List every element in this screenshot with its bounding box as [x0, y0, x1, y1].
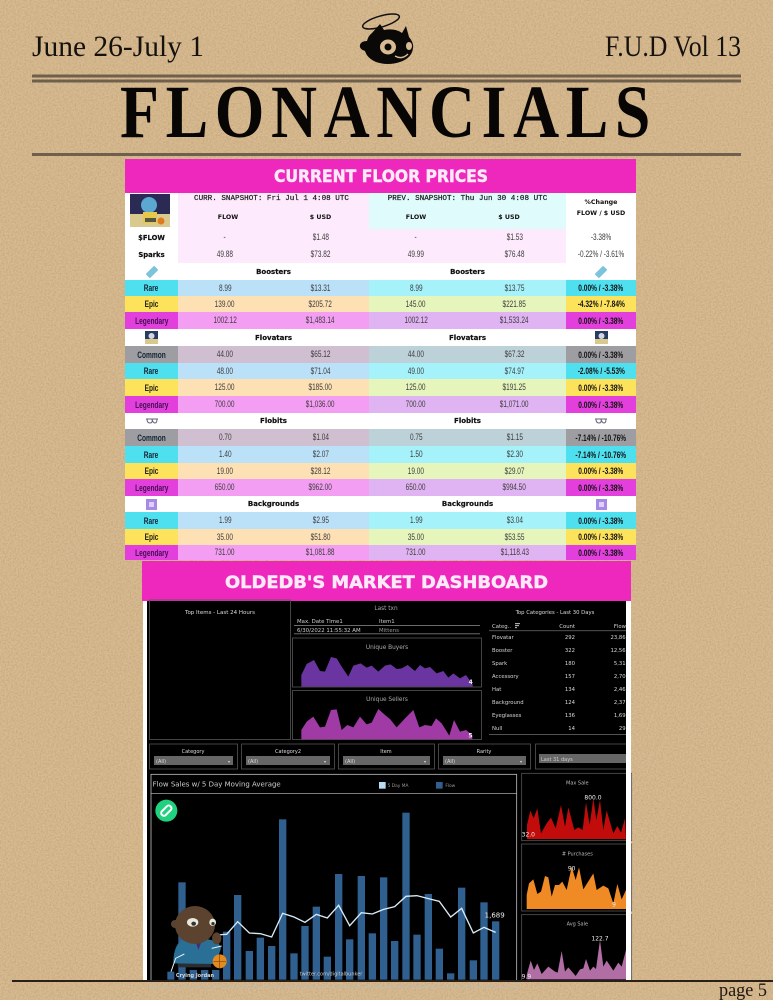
- row: Backgrounds rare: $3.04: [506, 515, 523, 526]
- row: Flovatars legendary: 700.00: [215, 399, 235, 410]
- row: Boosters epic: $221.85: [503, 298, 526, 310]
- chart: number of purchases: [522, 844, 632, 911]
- table: top categories: 180: [565, 661, 576, 667]
- filter: category: ▾: [228, 759, 230, 764]
- table: top categories: 1,693: [614, 713, 629, 719]
- row: Sparks: -0.22% / -3.61%: [578, 249, 624, 260]
- filter: category: Category: [182, 749, 204, 755]
- icon: crying jordan character: [171, 906, 227, 972]
- table: top categories: 157: [565, 674, 575, 680]
- row: Flovatars epic: 0.00% / -3.38%: [579, 382, 623, 392]
- row: Boosters epic: 145.00: [406, 298, 426, 310]
- filter: category2: [242, 744, 334, 769]
- previous snapshot column header: PREV. SNAPSHOT: Thu Jun 30 4:08 UTC: [388, 195, 547, 203]
- dashboard background: [143, 601, 631, 980]
- title: FLONANCIALS: [120, 71, 650, 154]
- filter: rarity: ▾: [520, 759, 522, 764]
- row: Flobits rare: Rare: [144, 450, 159, 460]
- volume label: F.U.D Vol 13: [605, 30, 741, 63]
- chart: unique buyers: Unique Buyers: [366, 645, 408, 651]
- percent change column header: %Change: [585, 199, 617, 206]
- row: Flobits common: $1.04: [312, 432, 329, 443]
- row: Flovatars legendary: Legendary: [135, 400, 168, 410]
- row: Flovatars rare: 49.00: [408, 366, 424, 376]
- chart: unique sellers: 5: [468, 732, 473, 739]
- row: Flobits epic: $29.07: [505, 466, 524, 476]
- icon: halo mascot: [360, 11, 413, 64]
- filter: category2: Category2: [275, 749, 301, 755]
- bars: [167, 813, 499, 980]
- table: top categories: 292: [565, 635, 575, 641]
- filter: date range: [536, 744, 630, 769]
- row: Flovatars epic: $191.25: [503, 382, 526, 393]
- row: Flobits epic: 19.00: [217, 466, 233, 476]
- row: Flobits legendary: 0.00% / -3.38%: [579, 482, 623, 492]
- row: Backgrounds rare: [125, 512, 636, 529]
- row: Boosters section: Boosters: [256, 268, 291, 276]
- filter: category: (All): [156, 759, 166, 765]
- row: Flovatars rare: $74.97: [505, 366, 524, 376]
- row: Backgrounds rare: 1.99: [219, 515, 231, 526]
- row: $FLOW: $FLOW: [138, 234, 165, 242]
- row: Sparks: $76.48: [505, 249, 524, 260]
- caption: twitter credit: twitter.com/digitalbunker: [300, 972, 363, 978]
- chart: number of purchases: 9: [612, 901, 616, 908]
- current snapshot column header: CURR. SNAPSHOT: Fri Jul 1 4:08 UTC: [194, 195, 349, 203]
- chart: max sale: [522, 773, 632, 841]
- current snapshot column header: $ USD: [310, 214, 331, 221]
- row: Boosters rare: Rare: [144, 283, 159, 293]
- row: Flobits legendary: $962.00: [309, 482, 332, 493]
- row: Backgrounds rare: Rare: [144, 516, 159, 526]
- table: top categories: Flow: [614, 624, 627, 630]
- filter: item: (All): [345, 759, 355, 765]
- table: top categories: 124: [565, 700, 576, 706]
- chart: max sale: Max Sale: [566, 780, 589, 786]
- panel: last transaction: Item1: [379, 619, 395, 625]
- row: Flovatars legendary: 0.00% / -3.38%: [579, 400, 623, 410]
- row: Flobits rare: $2.07: [312, 449, 329, 460]
- row: Flovatars common: [125, 346, 636, 363]
- heading: oldedb's market dashboard: [142, 561, 631, 601]
- legend: 5 Day MA: [388, 783, 408, 789]
- row: Boosters legendary: 0.00% / -3.38%: [579, 316, 623, 326]
- row: Flobits legendary: 650.00: [406, 482, 426, 493]
- row: Boosters legendary: $1,533.24: [500, 315, 529, 326]
- table: top categories: Eyeglasses: [492, 713, 522, 719]
- row: Flobits common: 0.75: [410, 432, 422, 443]
- row: Flobits section: Flobits: [454, 417, 481, 425]
- row: Flovatars epic: 125.00: [406, 382, 426, 393]
- table: top categories: 134: [565, 687, 576, 693]
- row: Sparks: Sparks: [138, 250, 165, 258]
- row: Flobits legendary: Legendary: [135, 482, 168, 492]
- filter: category: [150, 744, 238, 769]
- row: Sparks: $73.82: [311, 249, 330, 260]
- row: Flovatars section: Flovatars: [255, 334, 292, 342]
- row: Flovatars epic: Epic: [145, 382, 158, 392]
- table: top categories: [489, 610, 630, 735]
- row: Boosters section: [125, 263, 636, 280]
- table: top categories: Categ..: [492, 624, 511, 630]
- lower rule: [32, 153, 741, 156]
- row: Flobits common: $1.15: [506, 432, 523, 443]
- table: top categories: 322: [565, 648, 575, 654]
- chart: average sale: 122.7: [591, 935, 609, 942]
- row: Backgrounds epic: $51.80: [311, 532, 330, 542]
- row: Flovatars common: 44.00: [217, 349, 233, 360]
- chart: average sale: Avg Sale: [567, 922, 588, 928]
- row: $FLOW: [125, 229, 636, 246]
- row: Boosters legendary: [125, 312, 636, 329]
- row: Boosters epic: -4.32% / -7.84%: [577, 299, 625, 309]
- chart: unique buyers: 4: [469, 679, 473, 686]
- legend: [379, 782, 456, 789]
- row: Flobits epic: 0.00% / -3.38%: [579, 466, 623, 476]
- row: Boosters legendary: $1,483.14: [306, 315, 335, 326]
- row: Backgrounds epic: 35.00: [217, 532, 233, 542]
- filter: item: ▾: [424, 759, 426, 764]
- previous snapshot column header: [369, 193, 566, 229]
- row: Flobits common: Common: [137, 432, 166, 442]
- row: Backgrounds epic: Epic: [145, 532, 158, 542]
- table: top categories: 2,702: [614, 674, 629, 680]
- row: Sparks: 49.88: [217, 249, 233, 260]
- row: Flobits legendary: [125, 479, 636, 496]
- row: Flobits rare: -7.14% / -10.76%: [576, 450, 626, 460]
- table header: [125, 193, 636, 229]
- row: Flobits common: -7.14% / -10.76%: [576, 432, 626, 442]
- row: Backgrounds section: [125, 496, 636, 512]
- row: Boosters rare: 8.99: [410, 282, 422, 294]
- row: Flovatars legendary: $1,071.00: [500, 399, 529, 410]
- row: Flovatars epic: $185.00: [309, 382, 332, 393]
- white right edge of dashboard: [626, 601, 631, 980]
- moving average line: [216, 896, 496, 937]
- row: Backgrounds legendary: 731.00: [406, 547, 426, 558]
- table: top categories: 23,865: [610, 635, 629, 641]
- row: Boosters legendary: 1002.12: [404, 315, 428, 326]
- chart: max sale: 800.0: [584, 794, 602, 801]
- row: Flobits section: [125, 413, 636, 429]
- percent change column header: FLOW / $ USD: [577, 210, 625, 217]
- row: Boosters rare: [125, 280, 636, 296]
- filter: category2: (All): [248, 759, 258, 765]
- row: Flobits legendary: $994.50: [503, 482, 526, 493]
- row: Flovatars epic: [125, 379, 636, 396]
- row: Boosters rare: $13.75: [505, 282, 524, 294]
- row: Boosters rare: $13.31: [311, 282, 330, 294]
- row: Sparks: [125, 246, 636, 263]
- row: Flovatars section: Flovatars: [449, 334, 486, 342]
- issue date: June 26-July 1: [32, 30, 204, 63]
- row: Backgrounds legendary: $1,118.43: [500, 547, 529, 558]
- row: Backgrounds epic: $53.55: [505, 532, 524, 542]
- chart: number of purchases: 90: [568, 865, 576, 872]
- row: Flovatars common: $65.12: [311, 349, 330, 360]
- table: top categories: Flovatar: [492, 635, 514, 641]
- table: top categories: 136: [565, 713, 576, 719]
- caption: crying jordan: Crying Jordan: [176, 973, 215, 979]
- filter: rarity: Rarity: [477, 749, 491, 755]
- row: Backgrounds rare: 0.00% / -3.38%: [579, 516, 623, 526]
- row: $FLOW: -3.38%: [591, 232, 611, 243]
- chart: unique sellers: Unique Sellers: [366, 697, 408, 703]
- heading: oldedb's market dashboard: OLDEDB'S MARKET DASHBOARD: [225, 573, 548, 593]
- row: Flovatars rare: Rare: [144, 366, 159, 376]
- table: top categories: Hat: [492, 687, 501, 693]
- chart: number of purchases: # Purchases: [562, 852, 593, 858]
- row: Flovatars rare: 48.00: [217, 366, 233, 376]
- panel: current floor prices: [125, 159, 636, 560]
- chart: average sale: 9.9: [522, 974, 531, 981]
- table: top categories: Booster: [492, 648, 513, 654]
- icon: flow logo: [155, 800, 177, 822]
- row: Boosters rare: 0.00% / -3.38%: [579, 283, 623, 293]
- row: Backgrounds legendary: [125, 545, 636, 560]
- row: $FLOW: $1.53: [506, 232, 523, 243]
- table: top categories: 14: [568, 726, 576, 732]
- previous snapshot column header: $ USD: [498, 214, 520, 221]
- row: Backgrounds epic: [125, 529, 636, 545]
- row: Flobits epic: [125, 463, 636, 479]
- row: Boosters legendary: Legendary: [135, 316, 168, 326]
- chart: max sale: 32.0: [522, 831, 535, 838]
- row: Backgrounds epic: 35.00: [408, 532, 424, 542]
- row: Backgrounds section: Backgrounds: [442, 500, 493, 508]
- row: Flobits epic: Epic: [145, 466, 158, 476]
- filter: rarity: (All): [445, 759, 455, 765]
- filter: category2: ▾: [324, 759, 326, 764]
- chart: average sale: [522, 915, 632, 981]
- heading: current floor prices: CURRENT FLOOR PRICES: [274, 167, 488, 186]
- row: Flovatars rare: [125, 363, 636, 379]
- row: Flobits common: [125, 429, 636, 446]
- row: Flobits common: 0.70: [219, 432, 231, 443]
- percent change column header: [577, 199, 625, 217]
- panel: last transaction: Mittens: [379, 628, 399, 634]
- row: Flovatars common: 0.00% / -3.38%: [579, 350, 623, 360]
- chart: unique buyers: [292, 638, 482, 687]
- row: Backgrounds legendary: 731.00: [215, 547, 235, 558]
- row: Flovatars legendary: 700.00: [406, 399, 426, 410]
- table: top categories: Count: [559, 624, 575, 630]
- row: Flobits rare: 1.50: [410, 449, 422, 460]
- row: Flovatars rare: $71.04: [311, 366, 330, 376]
- row: Boosters section: Boosters: [450, 268, 485, 276]
- masthead: [32, 13, 741, 156]
- row: $FLOW: $1.48: [312, 232, 329, 243]
- legend: Flow: [445, 783, 456, 789]
- chart: unique sellers: [292, 690, 482, 740]
- row: Boosters rare: 8.99: [219, 282, 231, 294]
- chart frame and title: [151, 774, 517, 988]
- row: Flobits rare: [125, 446, 636, 463]
- panel: last transaction: 6/30/2022 11:55:32 AM: [297, 628, 361, 634]
- row: Backgrounds rare: $2.95: [312, 515, 329, 526]
- table: top categories: Null: [492, 726, 502, 732]
- row: Boosters epic: $205.72: [309, 298, 332, 310]
- panel: last transaction: [294, 606, 480, 634]
- row: Flovatars legendary: $1,036.00: [306, 399, 335, 410]
- previous snapshot column header: FLOW: [406, 214, 426, 221]
- panel: last transaction: Last txn: [374, 606, 398, 612]
- table: top categories: 290: [619, 726, 630, 732]
- filter: rarity: [438, 744, 530, 769]
- row: Sparks: 49.99: [408, 249, 424, 260]
- panel: top items: [150, 600, 290, 740]
- chart frame and title: Flow Sales w/ 5 Day Moving Average: [153, 781, 281, 789]
- row: Flobits epic: 19.00: [408, 466, 424, 476]
- row: Flovatars section: [125, 329, 636, 346]
- row: Flovatars common: $67.32: [505, 349, 524, 360]
- table: top categories: Top Categories - Last 30 Days: [515, 610, 595, 616]
- panel: last transaction: Max. Date Time1: [297, 619, 343, 625]
- row: Flobits epic: $28.12: [311, 466, 330, 476]
- row: Backgrounds rare: 1.99: [410, 515, 422, 526]
- row: Flovatars legendary: [125, 396, 636, 413]
- filter: date range: Last 31 days: [541, 757, 573, 763]
- row: Flobits rare: $2.30: [506, 449, 523, 460]
- table: top categories: Spark: [492, 661, 508, 667]
- row: Backgrounds section: Backgrounds: [248, 500, 299, 508]
- chart: flow sales with 5 day moving average: [151, 774, 517, 988]
- current snapshot column header: FLOW: [218, 214, 238, 221]
- row: Flobits section: Flobits: [260, 417, 287, 425]
- filter: item: [338, 744, 434, 769]
- row: Boosters epic: [125, 296, 636, 312]
- row: Boosters legendary: 1002.12: [213, 315, 237, 326]
- row: Boosters epic: Epic: [145, 299, 158, 309]
- heading: current floor prices: [125, 159, 636, 193]
- row: Flovatars rare: -2.08% / -5.53%: [577, 366, 625, 376]
- row: $FLOW: -: [224, 232, 226, 243]
- filter: item: Item: [380, 749, 392, 755]
- table: top categories: Background: [492, 700, 524, 706]
- row: Backgrounds legendary: 0.00% / -3.38%: [579, 548, 623, 558]
- row: Boosters epic: 139.00: [215, 298, 235, 310]
- row: Backgrounds legendary: $1,081.88: [306, 547, 335, 558]
- row: Backgrounds epic: 0.00% / -3.38%: [579, 532, 623, 542]
- row: Flovatars common: Common: [137, 350, 166, 360]
- footer rule: [12, 980, 773, 982]
- table: top categories: 2,379: [614, 700, 629, 706]
- row: Flovatars epic: 125.00: [215, 382, 235, 393]
- value label: 1,689: [485, 912, 505, 920]
- row: Backgrounds legendary: Legendary: [135, 548, 168, 558]
- current snapshot column header: [178, 193, 369, 229]
- table: top categories: 5,314: [614, 661, 630, 667]
- icon: flovatar avatar: [130, 194, 170, 227]
- row: $FLOW: -: [415, 232, 417, 243]
- panel: top items: Top Items - Last 24 Hours: [184, 610, 255, 616]
- table: top categories: Accessory: [492, 674, 519, 680]
- table: top categories: 12,565: [610, 648, 629, 654]
- row: Flobits rare: 1.40: [219, 449, 231, 460]
- top double rule: [32, 74, 741, 82]
- row: Flobits legendary: 650.00: [215, 482, 235, 493]
- table: top categories: 2,467: [614, 687, 629, 693]
- row: Flovatars common: 44.00: [408, 349, 424, 360]
